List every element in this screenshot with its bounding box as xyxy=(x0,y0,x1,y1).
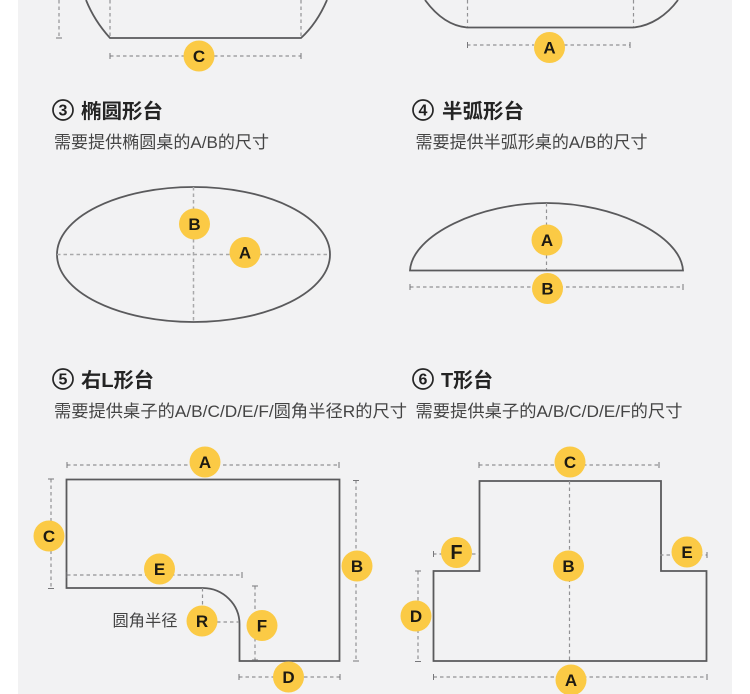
badge: L R xyxy=(186,606,218,636)
text: oval table description: 需要提供椭圆桌的A/B的尺寸 xyxy=(54,133,269,152)
badge: T F: F xyxy=(450,542,463,564)
badge: L C xyxy=(34,520,64,552)
badge: L F: F xyxy=(257,616,267,636)
heading: T table xyxy=(413,368,493,392)
badge: T D xyxy=(400,600,432,632)
heading: T table: 6 xyxy=(419,372,428,388)
badge: T D: D xyxy=(410,607,422,626)
badge: T C xyxy=(554,446,586,478)
heading: oval table xyxy=(53,99,163,123)
badge: T C: C xyxy=(564,453,576,472)
badge: T A xyxy=(556,664,586,694)
heading: oval table: 3 xyxy=(59,102,68,120)
badge: half-arc B xyxy=(532,273,563,304)
badge: half-arc B: B xyxy=(541,280,554,298)
badge: T A: A xyxy=(565,671,577,690)
badge: L A: A xyxy=(199,453,211,472)
heading: half-arc table: 半弧形台 xyxy=(442,99,524,123)
badge: T B xyxy=(553,550,584,582)
badge: half-arc A xyxy=(532,224,562,256)
badge: T F xyxy=(441,537,472,568)
badge: half-arc A: A xyxy=(541,231,553,250)
diagram: right L table xyxy=(34,446,372,692)
heading: right L table xyxy=(53,368,154,392)
badge: L E: E xyxy=(154,560,165,579)
heading: half-arc table xyxy=(413,99,524,123)
badge: oval A: A xyxy=(239,244,251,262)
badge: L A xyxy=(190,446,220,478)
badge: L E xyxy=(144,554,175,584)
badge: L B: B xyxy=(351,557,363,576)
badge: oval B xyxy=(179,208,210,240)
badge: L D xyxy=(273,662,304,692)
badge: L F xyxy=(246,610,278,641)
diagram: cropped top-right table xyxy=(425,0,678,63)
badge: L D: D xyxy=(282,668,295,687)
badge: L B xyxy=(342,550,372,582)
badge: T B: B xyxy=(562,557,575,576)
badge: T E: E xyxy=(681,543,693,562)
heading: oval table: 椭圆形台 xyxy=(81,99,163,123)
heading: right L table: 右L形台 xyxy=(81,368,154,392)
badge: L R: R xyxy=(196,612,208,631)
badge: L C: C xyxy=(43,527,55,546)
text: right L table description: 需要提供桌子的A/B/C/D/E/F/圆角半径R的尺寸 xyxy=(54,402,407,421)
diagram: cropped top-right table: A xyxy=(543,38,556,58)
text: T table description: 需要提供桌子的A/B/C/D/E/F的尺寸 xyxy=(416,402,682,421)
heading: right L table: 5 xyxy=(59,372,68,388)
badge: T E xyxy=(672,536,702,568)
label: corner radius: 圆角半径 xyxy=(112,612,178,630)
diagram: oval table xyxy=(57,187,330,322)
diagram: cropped top-left table: C xyxy=(193,47,205,66)
heading: T table: T形台 xyxy=(441,368,493,392)
diagram: half-arc table xyxy=(410,203,683,304)
badge: oval B: B xyxy=(188,215,201,234)
diagram: T table xyxy=(400,446,707,694)
badge: oval A xyxy=(230,237,260,268)
heading: half-arc table: 4 xyxy=(419,102,428,120)
text: half-arc table description: 需要提供半弧形桌的A/B的尺寸 xyxy=(416,133,648,152)
diagram: cropped top-left table xyxy=(56,0,327,72)
